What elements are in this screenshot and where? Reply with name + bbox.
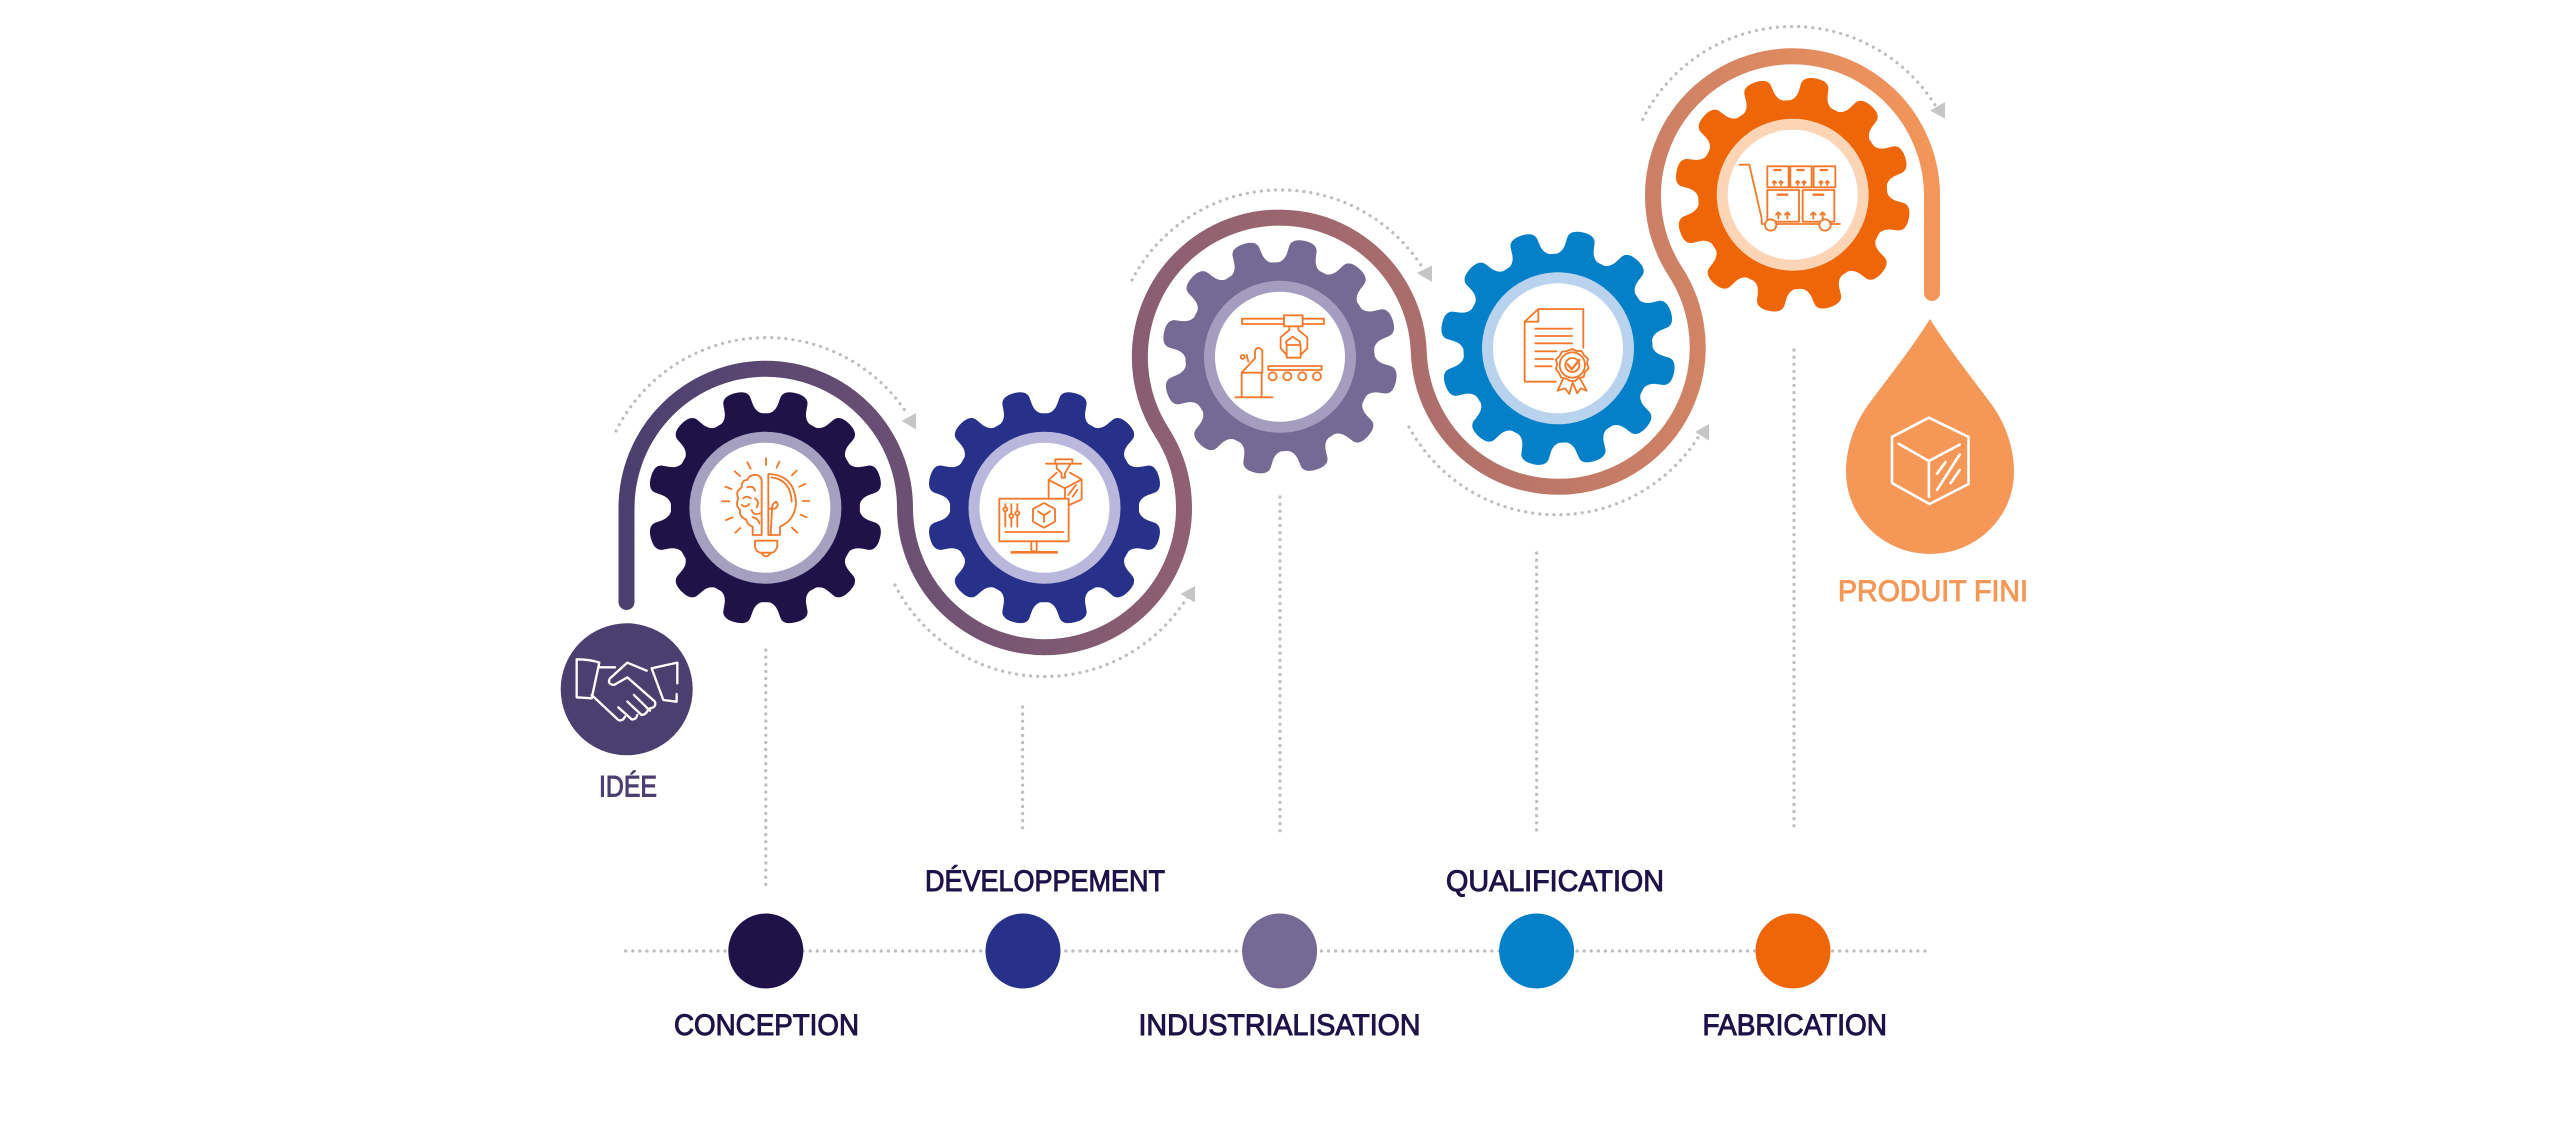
dotted connector: qualification <box>1535 553 1538 832</box>
timeline dot: conception <box>728 914 803 988</box>
dotted connector: industrialisation <box>1278 497 1282 832</box>
gear: conception <box>645 387 886 628</box>
gear: industrialisation <box>1153 230 1407 484</box>
icon: 3D printer and monitor <box>999 459 1082 552</box>
dotted arrow arc: conception <box>616 338 916 431</box>
dotted connector: conception <box>764 650 767 887</box>
icon: certified document <box>1525 309 1589 394</box>
icon: cart with boxes <box>1739 165 1840 231</box>
label: idée: IDÉE <box>599 770 657 804</box>
dotted arrow arc: développement <box>895 585 1195 677</box>
timeline <box>626 914 1927 988</box>
dotted connector: fabrication <box>1792 350 1796 832</box>
gear: qualification <box>1431 221 1685 475</box>
dotted arrow arc: qualification <box>1409 424 1709 515</box>
label: conception: CONCEPTION <box>674 1009 859 1042</box>
idée circle with handshake icon <box>561 623 693 755</box>
icon: robot arm and conveyor <box>1235 315 1324 397</box>
winding ribbon path <box>626 56 1932 647</box>
gear: développement <box>924 387 1165 628</box>
label: industrialisation: INDUSTRIALISATION <box>1138 1009 1420 1042</box>
timeline dot: industrialisation <box>1242 914 1317 988</box>
finished product drop with box icon <box>1846 319 2014 554</box>
dotted connector: développement <box>1021 707 1024 832</box>
timeline dot: développement <box>986 914 1060 988</box>
label: produit fini: PRODUIT FINI <box>1838 575 2028 608</box>
gear: fabrication <box>1665 67 1921 323</box>
timeline dot: fabrication <box>1756 914 1830 988</box>
label: fabrication: FABRICATION <box>1702 1009 1887 1042</box>
icon: brain and light bulb <box>722 458 809 556</box>
label: qualification: QUALIFICATION <box>1446 865 1664 898</box>
timeline dot: qualification <box>1499 914 1574 988</box>
label: développement: DÉVELOPPEMENT <box>925 865 1165 898</box>
dotted arrow arc: fabrication <box>1643 27 1945 119</box>
dotted arrow arc: industrialisation <box>1132 190 1432 282</box>
